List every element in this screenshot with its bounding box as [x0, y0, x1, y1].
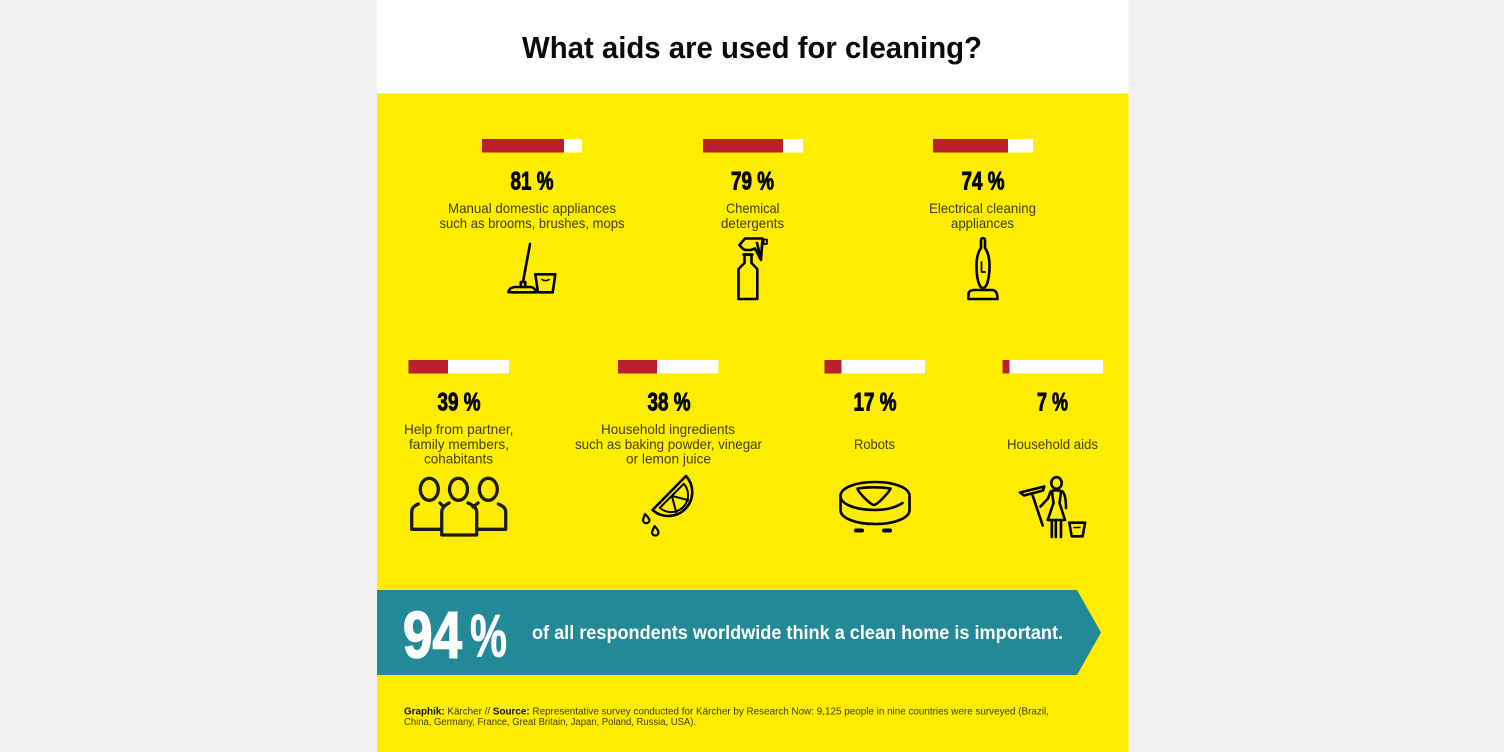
- panel: chemical detergents 79%: [703, 139, 803, 299]
- bar: 17%: [824, 360, 925, 374]
- label: chemical detergents: [721, 200, 784, 231]
- label: household aids: Household aids: [1007, 436, 1098, 452]
- title: What aids are used for cleaning?: [522, 30, 982, 65]
- bar: 81%: [482, 139, 582, 152]
- panel: manual domestic appliances 81%: [440, 139, 624, 292]
- label: electrical cleaning appliances: Electrical cleaning: [929, 200, 1036, 216]
- panel: robots 17%: [824, 360, 925, 530]
- value: 17%: 17 %: [854, 388, 896, 416]
- label: chemical detergents: detergents: [721, 215, 784, 231]
- icon: robot vacuum: [840, 482, 910, 530]
- source note: Graphik: Kärcher // Source: Representative survey conducted for Kärcher by Research Now: 9,125 people in nine countries were surveyed (Brazil,: [404, 706, 1049, 718]
- label: household ingredients: or lemon juice: [626, 450, 711, 466]
- label: household ingredients: Household ingredients: [601, 421, 735, 437]
- callout value: 94: [403, 598, 462, 672]
- bar: 79%: [703, 139, 803, 152]
- label: help from partner: [404, 421, 514, 466]
- icon: upright vacuum: [968, 238, 998, 299]
- value: 81%: 81 %: [510, 168, 554, 196]
- bar: 38%: [618, 360, 718, 374]
- value: 39%: 39 %: [438, 388, 480, 416]
- panel: help from partner 39%: [404, 360, 514, 535]
- panel: electrical cleaning appliances 74%: [929, 139, 1036, 299]
- label: electrical cleaning appliances: appliances: [951, 215, 1014, 231]
- bar: 39%: [408, 360, 509, 374]
- icon: mop and bucket: [508, 244, 555, 292]
- icon: spray bottle: [738, 238, 767, 299]
- icon: person with squeegee and bucket: [1020, 477, 1085, 537]
- value: 74%: 74 %: [962, 168, 1004, 196]
- label: chemical detergents: Chemical: [726, 200, 780, 216]
- value: 7%: 7 %: [1037, 388, 1068, 416]
- label: help from partner: Help from partner,: [404, 421, 514, 437]
- source note: [404, 706, 1049, 728]
- label: robots: Robots: [854, 436, 895, 452]
- callout banner: 94%: [377, 590, 1101, 675]
- label: household ingredients: such as baking powder, vinegar: [575, 436, 762, 452]
- panel: household ingredients 38%: [575, 360, 762, 536]
- callout text: of all respondents worldwide think a clean home is important.: [532, 623, 1063, 644]
- panel: household aids 7%: [1002, 360, 1103, 537]
- label: electrical cleaning appliances: [929, 200, 1036, 231]
- bar: 74%: [933, 139, 1033, 152]
- label: manual domestic appliances: such as brooms, brushes, mops: [440, 215, 624, 231]
- icon: lemon slice with drops: [643, 476, 692, 536]
- callout value: %: [470, 602, 507, 670]
- label: help from partner: family members,: [409, 436, 509, 452]
- bar: 7%: [1002, 360, 1103, 374]
- label: manual domestic appliances: [440, 200, 624, 231]
- label: manual domestic appliances: Manual domestic appliances: [448, 200, 616, 216]
- label: household ingredients: [575, 421, 762, 466]
- icon: three people: [412, 478, 506, 535]
- source note: China, Germany, France, Great Britain, Japan, Poland, Russia, USA).: [404, 717, 696, 728]
- label: help from partner: cohabitants: [424, 450, 493, 466]
- value: 79%: 79 %: [731, 168, 774, 196]
- value: 38%: 38 %: [648, 388, 690, 416]
